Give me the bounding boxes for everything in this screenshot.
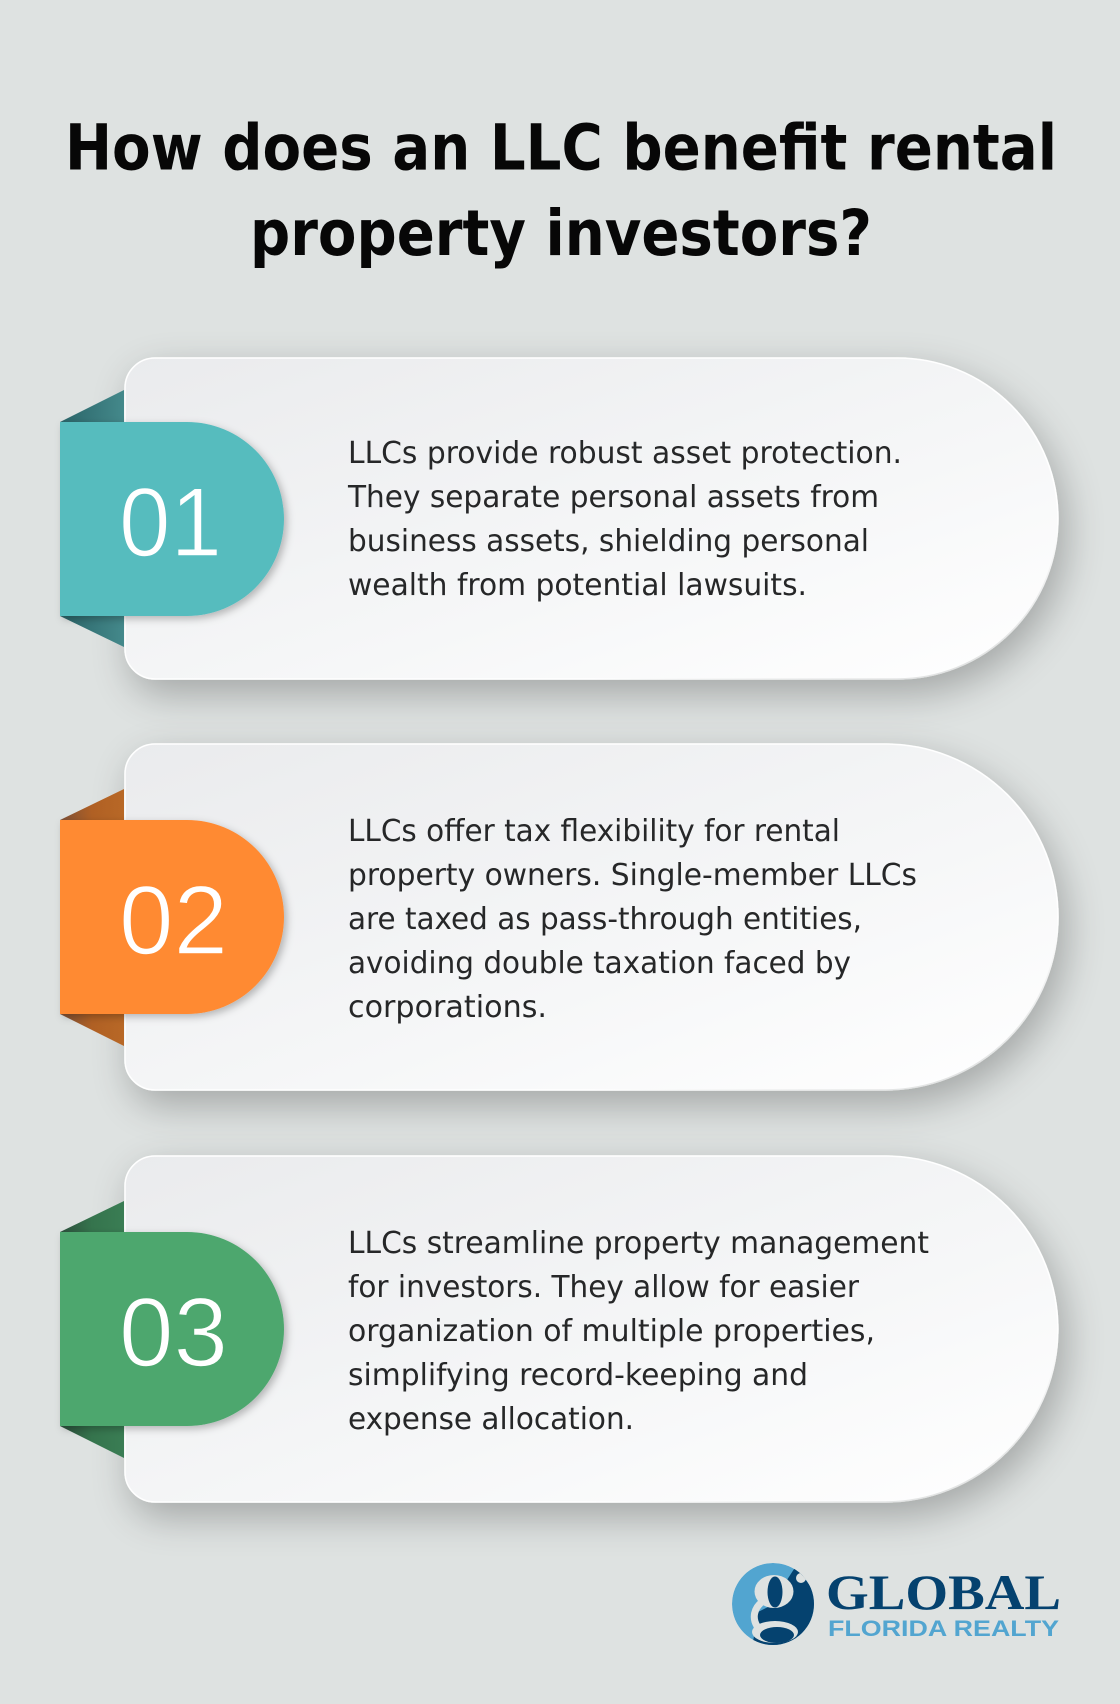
number badge 01 bbox=[60, 422, 284, 616]
panel: step 02 tax flexibility bbox=[60, 744, 1058, 1090]
text: step 01 description: wealth from potential lawsuits. bbox=[348, 568, 807, 603]
text: step 03 description: expense allocation. bbox=[348, 1402, 634, 1437]
text: step 01 description: They separate personal assets from bbox=[347, 480, 879, 515]
ribbon fold top 03 bbox=[60, 1201, 124, 1232]
logo wordmark GLOBAL: GLOBAL bbox=[826, 1564, 1061, 1620]
title bbox=[65, 112, 1057, 270]
card 03 bbox=[125, 1156, 1058, 1502]
number 01: 01 bbox=[119, 467, 222, 577]
text: step 03 description: LLCs streamline property management bbox=[348, 1226, 929, 1261]
text: step 03 description: organization of multiple properties, bbox=[348, 1314, 875, 1349]
text: step 03 description bbox=[348, 1226, 929, 1437]
logo: Global Florida Realty bbox=[732, 1563, 1061, 1650]
text: step 02 description: avoiding double taxation faced by bbox=[348, 946, 851, 981]
text: step 02 description bbox=[348, 814, 917, 1025]
number badge 02 bbox=[60, 820, 284, 1014]
panel: step 03 property management bbox=[60, 1156, 1058, 1502]
card 02 bbox=[125, 744, 1058, 1090]
ribbon fold top 02 bbox=[60, 789, 124, 820]
text: step 02 description: LLCs offer tax flexibility for rental bbox=[348, 814, 840, 849]
text: step 02 description: are taxed as pass-through entities, bbox=[348, 902, 862, 937]
ribbon fold bottom 03 bbox=[60, 1426, 124, 1458]
title: property investors? bbox=[250, 197, 872, 270]
text: step 01 description: business assets, shielding personal bbox=[348, 524, 869, 559]
ribbon fold bottom 02 bbox=[60, 1014, 124, 1046]
ribbon fold top 01 bbox=[60, 390, 124, 422]
text: step 01 description bbox=[347, 436, 902, 603]
panel: step 01 asset protection bbox=[60, 358, 1058, 679]
card 01 bbox=[125, 358, 1058, 679]
number badge 03 bbox=[60, 1232, 284, 1426]
text: step 02 description: corporations. bbox=[348, 990, 547, 1025]
number 02: 02 bbox=[119, 865, 228, 975]
number 03: 03 bbox=[119, 1277, 228, 1387]
icon: g monogram in circle bbox=[732, 1563, 814, 1645]
ribbon fold bottom 01 bbox=[60, 616, 124, 647]
text: step 03 description: for investors. They allow for easier bbox=[348, 1270, 859, 1305]
logo wordmark FLORIDA REALTY: FLORIDA REALTY bbox=[828, 1616, 1059, 1641]
text: step 01 description: LLCs provide robust asset protection. bbox=[348, 436, 902, 471]
text: step 03 description: simplifying record-keeping and bbox=[348, 1358, 808, 1393]
text: step 02 description: property owners. Single-member LLCs bbox=[348, 858, 917, 893]
